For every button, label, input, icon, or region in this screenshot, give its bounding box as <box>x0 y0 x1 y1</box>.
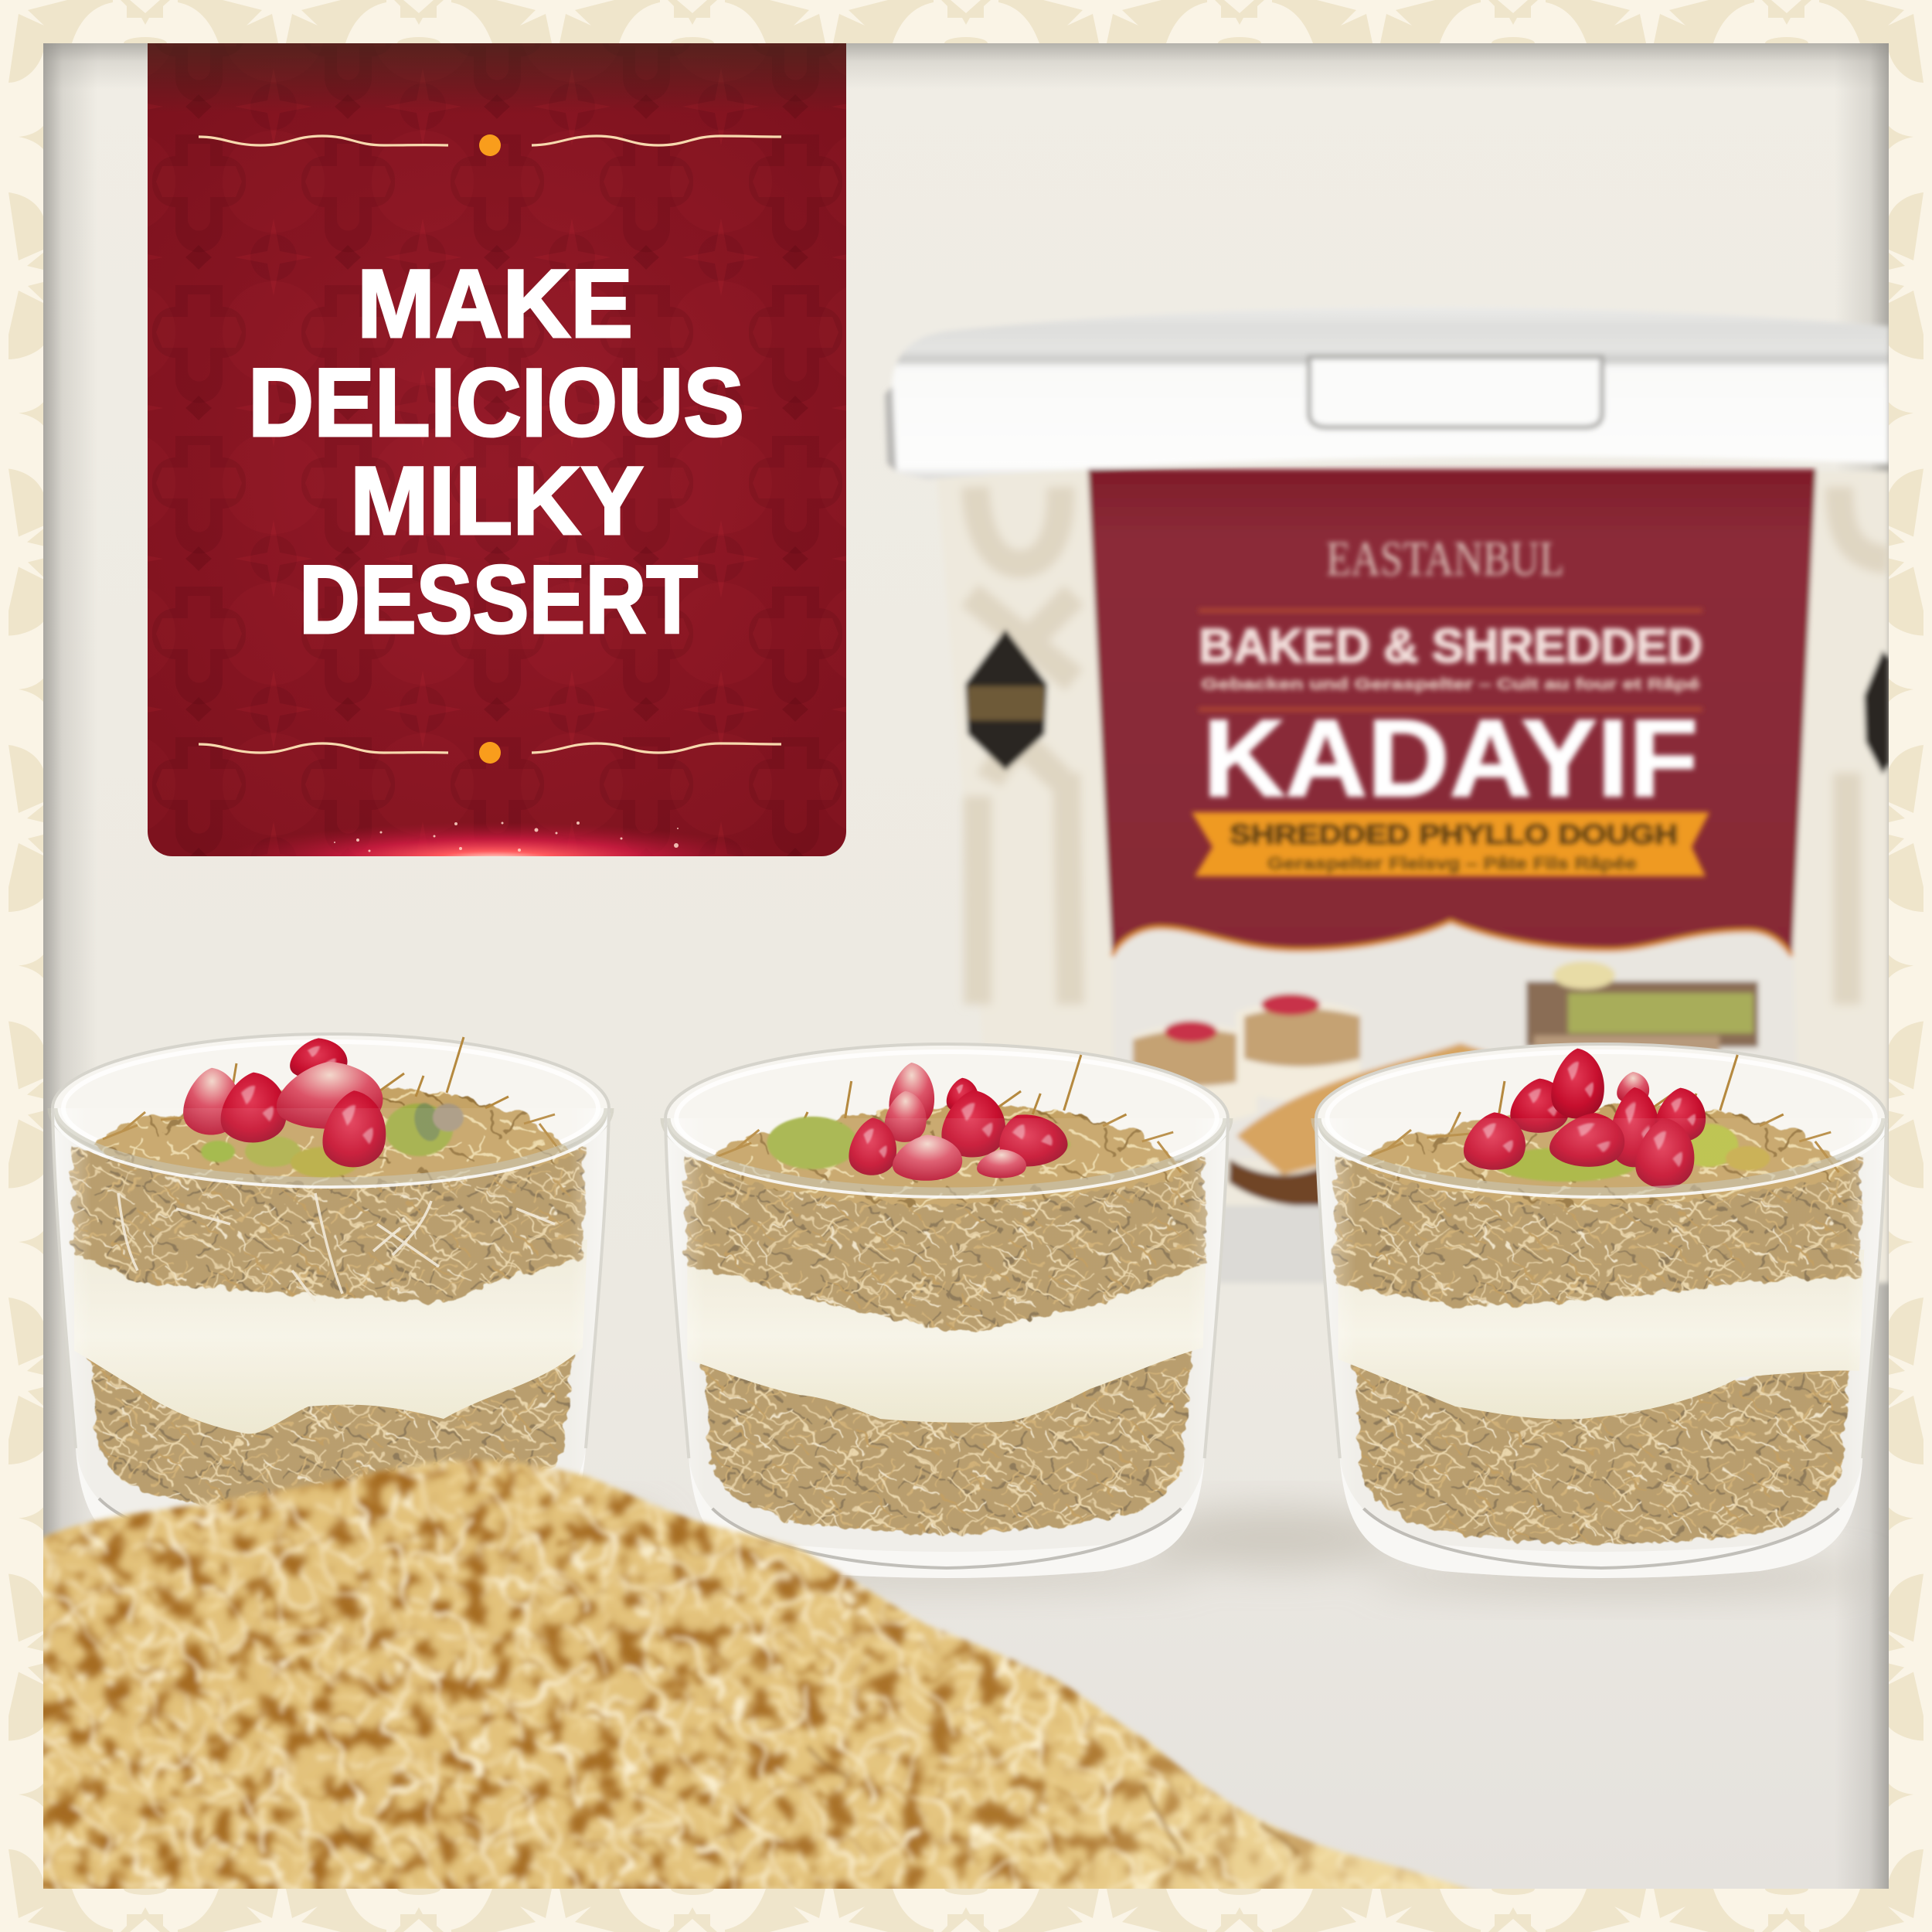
glass 3 lower kadayif layer <box>1351 1342 1852 1545</box>
glass 3 pomegranate arils <box>1464 1049 1706 1188</box>
glass 1 top kadayif surface <box>95 1087 574 1187</box>
label rules <box>1199 611 1702 709</box>
bottom ornament: orange dot <box>479 742 501 764</box>
tub black badge right <box>1864 651 1889 774</box>
shredded dough and board on label <box>1229 1043 1530 1206</box>
heap of shredded kadayif in foreground <box>0 1437 1546 1917</box>
glass 3 pistachios <box>1495 1124 1770 1182</box>
label heading baked and shredded: BAKED & SHREDDED <box>1199 620 1702 673</box>
glass 3 top kadayif surface <box>1359 1105 1851 1205</box>
title: DESSERT <box>299 546 698 654</box>
card top shade <box>148 43 846 113</box>
glass 3 milk pudding layer <box>1338 1250 1864 1419</box>
glass 1 milk pudding layer <box>74 1240 587 1434</box>
top ornament: orange dot <box>479 134 501 156</box>
glass 1 lower kadayif layer <box>87 1332 575 1518</box>
glass 2 top kadayif surface <box>705 1105 1189 1205</box>
glass 1 pistachios <box>201 1100 464 1178</box>
glass 2 upper kadayif layer <box>684 1157 1206 1333</box>
table shadows under glasses <box>572 1507 1878 1594</box>
ribbon heading: SHREDDED PHYLLO DOUGH <box>1230 818 1678 850</box>
glass 2 milk pudding layer <box>687 1250 1206 1423</box>
glass 1 pomegranate arils <box>183 1038 386 1167</box>
label sub line: Gebacken und Geraspelter – Cuit au four et Râpé <box>1201 676 1700 693</box>
lid tab <box>1309 357 1602 427</box>
glass 2 pistachios <box>767 1117 1070 1169</box>
dessert glass 1 <box>53 1034 609 1568</box>
lid <box>892 307 1889 479</box>
title: MAKE <box>357 250 633 358</box>
card sparkles <box>334 821 679 852</box>
bottom ornament: wave left <box>199 743 448 753</box>
card ornament pattern <box>148 43 846 856</box>
red label <box>1088 469 1816 956</box>
ribbon sub line: Geraspelter Fleisvg – Pâte Fils Râpée <box>1267 853 1637 873</box>
dessert glass 2 <box>665 1044 1228 1578</box>
card background <box>148 43 846 856</box>
label product name: KADAYIF <box>1202 697 1699 820</box>
heap pale overlay strands <box>0 1437 1546 1917</box>
heap base strands <box>0 1437 1546 1917</box>
cake on label left <box>1133 1021 1257 1124</box>
bottom ornament: wave right <box>532 743 781 753</box>
title: DELICIOUS <box>248 349 744 457</box>
baklava on label <box>1526 961 1758 1074</box>
tub side ornament <box>970 487 1889 1005</box>
title <box>248 250 744 654</box>
cake on label right <box>1236 994 1360 1101</box>
glass 2 lower kadayif layer <box>700 1335 1193 1533</box>
label brand name: EASTANBUL <box>1326 531 1564 586</box>
tub base shadow <box>1217 1206 1333 1283</box>
tub lower image panel <box>1112 912 1801 1159</box>
panel: red title card <box>148 43 846 896</box>
title: MILKY <box>350 447 644 555</box>
orange wave edge <box>1112 921 1792 956</box>
tub body <box>937 471 1889 1283</box>
top ornament: wave left <box>199 136 448 145</box>
orange ribbon <box>1192 812 1709 876</box>
dessert glass 3 <box>1316 1044 1886 1578</box>
top ornament: wave right <box>532 136 781 145</box>
heap brown accents <box>340 1747 1298 1862</box>
glass 3 upper kadayif layer <box>1335 1157 1862 1306</box>
glass 2 pomegranate arils <box>849 1063 1077 1181</box>
lid left lip <box>885 386 896 471</box>
glass 1 upper kadayif layer <box>71 1147 586 1303</box>
heap light falloff <box>0 1437 1546 1917</box>
heap toasted patches <box>0 1437 1546 1917</box>
product tub: Kadayif bucket (blurred background) <box>885 307 1889 1283</box>
tub black badge left <box>965 629 1047 770</box>
card bottom glow <box>224 822 765 896</box>
